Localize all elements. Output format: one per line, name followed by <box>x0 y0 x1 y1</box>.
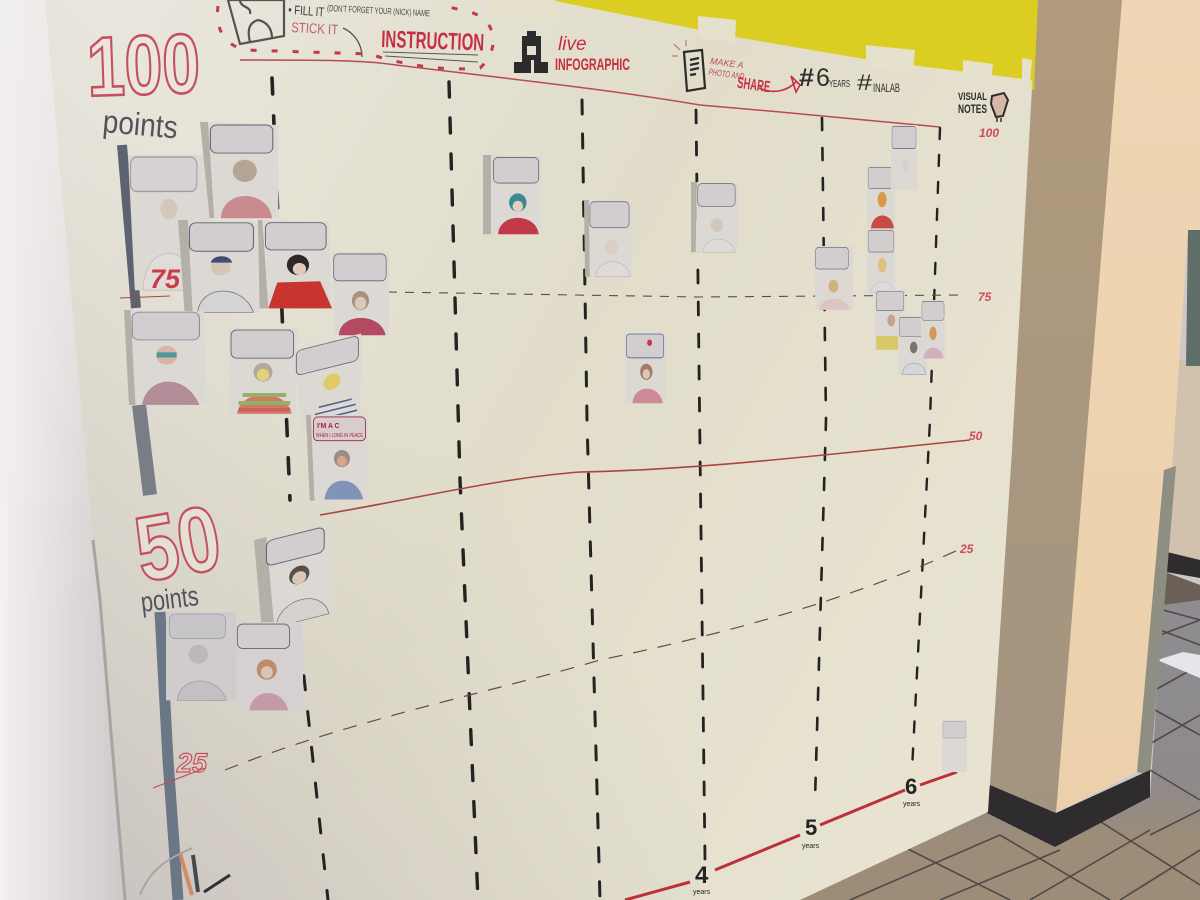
arrow to hashtags <box>759 76 800 92</box>
vertical dashed year lines <box>272 78 940 900</box>
card: pale pencil portrait two <box>691 182 738 252</box>
red top line <box>240 60 940 127</box>
hashtags: # <box>857 70 873 95</box>
hashtags: INALAB <box>873 81 900 95</box>
phone icon <box>672 40 705 91</box>
floor tiles <box>790 572 1200 900</box>
card: flowered jumper portrait <box>332 252 389 335</box>
live infographic logo: INFOGRAPHIC <box>555 55 630 74</box>
corridor back wall <box>1150 360 1200 560</box>
live infographic logo <box>514 31 630 74</box>
instruction step text: • FILL IT <box>288 2 325 20</box>
pillar front face <box>1056 0 1200 813</box>
make a photo and share: SHARE <box>736 75 771 96</box>
card: woman with grey cardigan <box>254 521 332 632</box>
card: blue check shirt portrait: I'M A C <box>317 423 339 430</box>
scale numbers right: 50 <box>969 429 983 443</box>
instruction step text: STICK IT <box>291 19 339 37</box>
scale numbers right: 75 <box>978 290 992 304</box>
pencil cup <box>140 848 230 895</box>
hashtags: # <box>799 64 814 92</box>
visual notes badge <box>958 91 1008 122</box>
year labels: years <box>693 889 711 896</box>
yellow wall band <box>530 0 1038 90</box>
heading: 100 points: points <box>101 103 179 146</box>
card: pale blonde portrait <box>814 246 853 310</box>
year labels: years <box>903 801 921 808</box>
year labels: 5 <box>805 815 817 840</box>
heading: 100 points <box>85 16 202 146</box>
scale numbers right: 100 <box>979 126 999 140</box>
heading: instruction <box>381 26 485 62</box>
heading: instruction: INSTRUCTION <box>381 26 485 57</box>
masking tapes <box>488 0 1032 84</box>
year labels <box>693 774 921 896</box>
hashtags <box>799 64 900 95</box>
dark skirting in corridor <box>1166 552 1200 578</box>
card: teal hat red dots <box>483 155 541 234</box>
instruction step text: (DON'T FORGET YOUR (NICK) NAME <box>327 3 430 18</box>
heading: 50 points: 50 <box>128 487 228 602</box>
card: red stripes portrait <box>867 166 895 228</box>
hashtags: YEARS <box>829 79 850 90</box>
card: man in blue jacket <box>178 220 258 312</box>
year labels: years <box>802 843 820 850</box>
card: woman in red dress <box>258 220 332 308</box>
instruction step text <box>288 2 430 57</box>
heading: 50 points: points <box>139 580 200 618</box>
card: green glasses portrait <box>124 310 206 405</box>
solid 50 line <box>320 440 970 515</box>
window <box>1186 230 1200 366</box>
year labels: 6 <box>905 774 917 799</box>
card: yellow skirt portrait <box>875 290 905 350</box>
left 75 and 25 marks <box>120 264 208 788</box>
card: red heart portrait <box>625 333 666 403</box>
heading: 100 points: 100 <box>85 16 202 114</box>
card: striped dress portrait <box>229 328 297 415</box>
card: faint pale portrait <box>128 155 210 290</box>
hashtags: 6 <box>816 64 830 92</box>
year labels: 4 <box>695 862 709 889</box>
card: blue check shirt portrait: WHEN I LONG IN PEACE <box>316 433 364 439</box>
card: blonde striped top portrait <box>295 334 361 431</box>
left 75 and 25 marks: 25 <box>176 748 208 778</box>
make a photo and share: MAKE A <box>709 56 744 70</box>
make a photo and share <box>706 56 773 96</box>
dashed 25 line <box>225 550 958 770</box>
instruction sketch icon <box>228 0 284 44</box>
card: orange hair portrait <box>921 300 945 358</box>
visual notes badge: VISUAL <box>958 91 987 103</box>
card: red hair girl portrait <box>236 622 303 710</box>
card: pink sweater portrait <box>200 122 278 218</box>
card: pale blonde narrow portrait <box>867 229 895 293</box>
instruction dashed frame <box>217 5 493 69</box>
pillar dark base <box>985 770 1150 847</box>
make a photo and share: PHOTO AND <box>708 67 745 82</box>
card: pale pencil portrait <box>584 200 632 277</box>
card: bottom right blank note <box>942 720 967 772</box>
left 75 and 25 marks: 75 <box>150 264 181 294</box>
grey scale bars <box>122 145 178 900</box>
glass panel edge <box>1137 466 1176 775</box>
red bottom axis <box>625 772 957 900</box>
dashed 75 line <box>388 292 960 297</box>
card: top faint portrait <box>891 125 917 190</box>
live infographic logo: live <box>558 34 587 55</box>
scale numbers right: 25 <box>959 542 974 556</box>
scale numbers right <box>959 126 999 556</box>
visual notes badge: NOTES <box>958 102 987 116</box>
card: faint grey portrait <box>166 612 236 700</box>
pillar side face <box>990 0 1122 813</box>
card: blue check shirt portrait <box>306 415 368 501</box>
card: text note portrait <box>898 316 927 374</box>
